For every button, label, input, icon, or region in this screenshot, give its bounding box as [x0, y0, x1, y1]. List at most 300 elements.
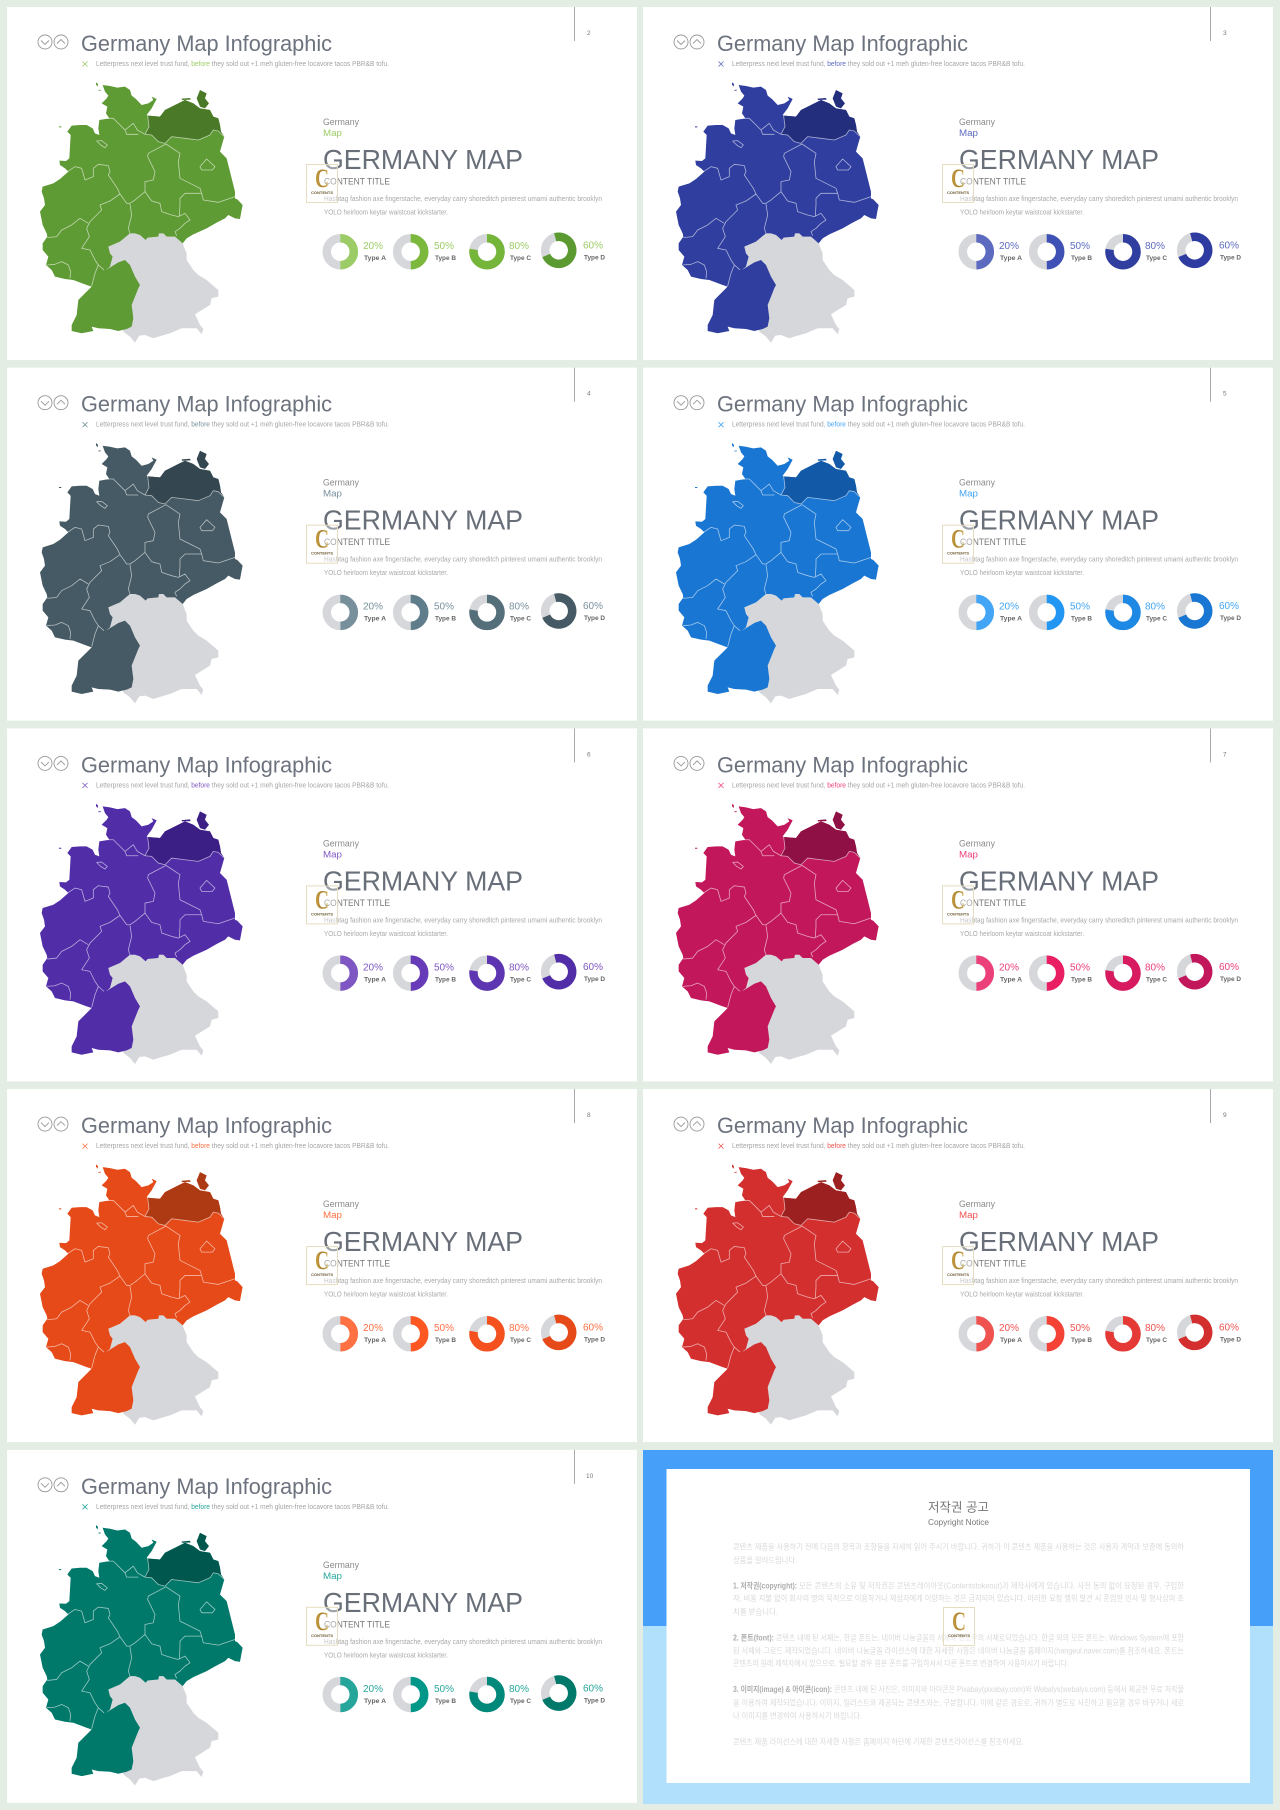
donut: Type B 50% [397, 960, 456, 987]
heading: GERMANY MAP [959, 144, 1159, 175]
donut: Type A 20% [963, 1320, 1022, 1347]
donut: Type D 60% [542, 1316, 605, 1349]
donut: Type B 50% [397, 238, 456, 265]
map: Germany [676, 1164, 879, 1425]
panel background [7, 368, 637, 721]
donut: Type A 20% [963, 599, 1022, 626]
page number: 8 [587, 1112, 591, 1119]
donut: Type D 60%: Type D [584, 1697, 605, 1704]
region: Mecklenburg highlight [781, 451, 860, 504]
donut: Type C 80% [474, 960, 531, 987]
donut: Type D 60%: 60% [1219, 962, 1239, 973]
state borders [683, 1198, 871, 1368]
donut: Type A 20%: 20% [363, 962, 383, 973]
donut: Type C 80% [1110, 238, 1167, 265]
description: Hashtag fashion axe fingerstache, everyday carry shoreditch pinterest umami authentic brooklyn [960, 196, 1238, 203]
subtitle: Letterpress next level trust fund, before they sold out +1 meh gluten-free locavore tacos PBR&B tofu. [96, 1143, 389, 1150]
icon: close mark [718, 1144, 724, 1149]
paragraph 3: image and icon: 나 이미지를 변경하여 사용하시기 바랍니다. [733, 1710, 862, 1720]
region: Mecklenburg highlight [145, 1172, 224, 1225]
state borders [47, 837, 235, 1007]
watermark logo: CONTENTS [947, 190, 969, 195]
watermark logo: C [951, 1246, 965, 1275]
subtitle: Letterpress next level trust fund, before they sold out +1 meh gluten-free locavore tacos PBR&B tofu. [96, 1504, 389, 1511]
donut: Type D 60%: Type D [1220, 1337, 1241, 1344]
map: Germany [676, 804, 879, 1064]
icon: chevron buttons [674, 35, 704, 49]
donut: Type C 80%: Type C [510, 616, 531, 623]
donut: Type C 80% [474, 238, 531, 265]
donut: Type D 60% [1178, 234, 1241, 267]
paragraph 1: copyright [733, 1580, 1185, 1616]
donut: Type B 50%: 50% [1070, 962, 1090, 973]
heading: GERMANY MAP [323, 1587, 523, 1618]
page number: 5 [1223, 391, 1227, 398]
slide 8: orange [7, 1089, 637, 1442]
donut: Type D 60% [542, 1677, 605, 1710]
donut: Type C 80%: Type C [510, 1698, 531, 1705]
page marker line [1210, 1089, 1211, 1123]
donut: Type B 50% [1033, 238, 1092, 265]
icon: chevron buttons [674, 396, 704, 410]
subtitle: Letterpress next level trust fund, before they sold out +1 meh gluten-free locavore tacos PBR&B tofu. [732, 782, 1025, 789]
title: Germany Map Infographic [717, 1113, 968, 1138]
label: Germany: Germany [959, 1199, 995, 1209]
donut: Type B 50%: 50% [1070, 241, 1090, 252]
donut: Type B 50%: Type B [1071, 1337, 1092, 1344]
paragraph 3: image and icon [733, 1684, 1184, 1720]
donut: Type C 80%: Type C [510, 1337, 531, 1344]
description: YOLO heirloom keytar waistcoat kickstarter. [324, 210, 448, 216]
label: Germany: Germany [959, 838, 995, 848]
donut: Type D 60%: Type D [1220, 615, 1241, 622]
region: main states [40, 804, 243, 1055]
content title: CONTENT TITLE [324, 537, 390, 548]
region: main states [676, 804, 879, 1055]
watermark logo: C [315, 525, 329, 554]
donut: Type B 50%: 50% [1070, 602, 1090, 613]
donut: Type A 20%: Type A [364, 976, 386, 983]
donut: Type D 60% [1178, 594, 1241, 628]
paragraph 1: copyright: 모든 콘텐츠의 소유 및 저작권은 콘텐츠레이아웃(Contentstokeout)과 제작사에게 있습니다. 사전 동의 없이 요청된 경우, 구입한 [799, 1580, 1185, 1590]
donut: Type B 50%: Type B [435, 255, 456, 262]
icon: close mark [82, 783, 88, 788]
donut: Type A 20% [327, 960, 386, 987]
watermark logo [942, 1246, 974, 1285]
region: Mecklenburg highlight [145, 1533, 224, 1586]
donut: Type C 80%: Type C [1146, 616, 1167, 623]
intro paragraph: 상품을 알려드립니다. [733, 1555, 797, 1565]
paragraph 1: copyright: 치를 받습니다. [733, 1606, 778, 1616]
donut: Type D 60%: 60% [583, 1683, 603, 1694]
donut: Type A 20%: 20% [363, 241, 383, 252]
donut: Type A 20%: Type A [1000, 1337, 1022, 1344]
intro paragraph: 콘텐츠 제품을 사용하기 전에 다음의 항목과 조항들을 자세히 읽어 주시기 바랍니다. 귀하가 이 콘텐츠 제품을 사용하는 것은 사용자 계약과 보증에 동의하 [733, 1542, 1185, 1552]
copyright title: 저작권 공고 [928, 1500, 989, 1514]
donut: Type B 50%: Type B [435, 616, 456, 623]
icon: close mark [82, 422, 88, 427]
donut: Type C 80%: 80% [509, 1684, 529, 1695]
slide 3: navy [643, 7, 1273, 360]
subtitle: Letterpress next level trust fund, before they sold out +1 meh gluten-free locavore tacos PBR&B tofu. [96, 61, 389, 68]
heading: GERMANY MAP [959, 1226, 1159, 1257]
state borders [683, 116, 871, 286]
donut: Type B 50% [1033, 599, 1092, 626]
donut: Type B 50%: Type B [1071, 255, 1092, 262]
donut: Type D 60%: 60% [1219, 1323, 1239, 1334]
title: Germany Map Infographic [717, 31, 968, 56]
paragraph 2: font [733, 1632, 1185, 1668]
icon: close mark [718, 62, 724, 66]
map: Germany [40, 1525, 243, 1785]
page number: 9 [1223, 1112, 1227, 1119]
donut: Type B 50%: Type B [1071, 976, 1092, 983]
label: Map: Map [323, 849, 342, 859]
paragraph 2: font: 2. 폰트(font): [733, 1634, 774, 1642]
region: Mecklenburg highlight [145, 811, 224, 865]
watermark logo [944, 1607, 974, 1646]
donut: Type D 60%: 60% [583, 962, 603, 973]
heading: GERMANY MAP [959, 505, 1159, 536]
donut: Type C 80%: Type C [1146, 976, 1167, 983]
content title: CONTENT TITLE [324, 898, 390, 909]
paragraph 1: copyright: 자, 비용 지불 없이 회사의 명의 목적으로 이용하거나 제삼자에게 이양하는 것은 금지되어 있습니다. 이러한 요청 행위 발견 시 준엄한 민사 및 형사상의 조 [733, 1593, 1184, 1603]
watermark logo: C [951, 525, 965, 554]
donut: Type D 60%: Type D [584, 615, 605, 622]
donut: Type A 20%: Type A [1000, 616, 1022, 623]
donut: Type D 60%: Type D [584, 254, 605, 262]
watermark logo [306, 1246, 338, 1285]
donut: Type C 80%: 80% [509, 602, 529, 613]
page number: 4 [587, 391, 591, 398]
copyright subtitle: Copyright Notice [928, 1518, 990, 1527]
icon: close mark [82, 1504, 88, 1509]
description: YOLO heirloom keytar waistcoat kickstarter. [960, 931, 1084, 938]
map: Germany [676, 82, 879, 343]
panel background [643, 1089, 1273, 1442]
donut: Type B 50%: Type B [435, 1337, 456, 1344]
donut: Type C 80%: 80% [1145, 241, 1165, 252]
region: main states [40, 443, 243, 694]
slide 10: teal [7, 1450, 637, 1803]
panel background [643, 368, 1273, 721]
watermark logo [942, 885, 974, 924]
description [324, 917, 602, 938]
donut: Type C 80%: 80% [1145, 962, 1165, 973]
paragraph 1: copyright: 1. 저작권(copyright): [733, 1580, 797, 1590]
description: Hashtag fashion axe fingerstache, everyday carry shoreditch pinterest umami authentic brooklyn [324, 1639, 602, 1646]
description [960, 196, 1238, 216]
blue upper band [643, 1450, 1273, 1626]
donut: Type C 80%: 80% [1145, 602, 1165, 613]
watermark logo: CONTENTS [311, 911, 333, 916]
donut: Type A 20%: Type A [1000, 255, 1022, 262]
panel background [7, 728, 637, 1081]
map: Germany [40, 1164, 243, 1425]
donut: Type D 60%: Type D [1220, 976, 1241, 983]
page marker line [574, 368, 575, 402]
watermark logo: C [315, 1607, 329, 1636]
label: Map: Map [323, 1571, 342, 1581]
watermark logo: C [951, 885, 965, 914]
label: Germany: Germany [323, 1560, 359, 1570]
watermark logo: CONTENTS [948, 1633, 970, 1638]
region: main states [40, 1525, 243, 1776]
donut: Type D 60%: Type D [584, 976, 605, 983]
page number: 6 [587, 751, 591, 758]
watermark logo: CONTENTS [947, 1272, 969, 1277]
label: Map: Map [959, 489, 978, 499]
state borders [683, 476, 871, 647]
label: Map: Map [323, 489, 342, 499]
paragraph 3: image and icon: 을 이용하여 제작되었습니다. 이미지, 일러스트와 제공되는 콘텐츠와는, 구분합니다. 이에 같은 경로로, 귀하가 별도로 사진하고 필요할 경우 바꾸거나 새로 [733, 1698, 1184, 1708]
icon: chevron buttons [38, 396, 68, 410]
icon: chevron buttons [38, 1478, 68, 1492]
description: YOLO heirloom keytar waistcoat kickstarter. [960, 210, 1084, 216]
map: Germany [40, 82, 243, 343]
icon: chevron buttons [674, 1117, 704, 1131]
watermark logo [306, 1607, 338, 1645]
region: main states [676, 82, 879, 333]
watermark logo: CONTENTS [311, 1633, 333, 1638]
page marker line [574, 1450, 575, 1484]
description: YOLO heirloom keytar waistcoat kickstarter. [960, 570, 1084, 577]
donut: Type D 60% [542, 955, 605, 988]
watermark logo: C [315, 885, 329, 914]
page marker line [574, 1089, 575, 1123]
region: Bavaria [742, 955, 854, 1064]
panel background [7, 1450, 637, 1803]
label: Germany: Germany [959, 478, 995, 488]
watermark logo: CONTENTS [947, 911, 969, 916]
donut: Type A 20%: Type A [364, 1337, 386, 1344]
panel background [7, 1089, 637, 1442]
light blue lower band [643, 1626, 1273, 1804]
donut: Type A 20%: 20% [999, 1323, 1019, 1334]
region: Bavaria [106, 233, 218, 343]
watermark logo: CONTENTS [947, 551, 969, 556]
region: Bavaria [106, 594, 218, 703]
page marker line [574, 7, 575, 41]
donut: Type D 60%: 60% [1219, 601, 1239, 612]
donut: Type B 50%: 50% [434, 241, 454, 252]
heading: GERMANY MAP [323, 865, 523, 896]
title: Germany Map Infographic [81, 1113, 332, 1138]
donut: Type C 80% [474, 1681, 531, 1708]
slide 9: red [643, 1089, 1273, 1442]
icon: close mark [82, 62, 88, 66]
content title: CONTENT TITLE [324, 1259, 390, 1270]
donut: Type B 50%: 50% [1070, 1323, 1090, 1334]
region: Bavaria [742, 1315, 854, 1425]
icon: chevron buttons [38, 35, 68, 49]
content title: CONTENT TITLE [960, 898, 1026, 909]
heading: GERMANY MAP [323, 505, 523, 536]
donut: Type D 60%: 60% [583, 1323, 603, 1334]
donut: Type C 80%: 80% [509, 1323, 529, 1334]
page number: 3 [1223, 30, 1227, 37]
description [960, 1278, 1238, 1299]
label: Germany: Germany [323, 117, 359, 127]
donut: Type A 20%: 20% [363, 1323, 383, 1334]
label: Map: Map [959, 849, 978, 859]
icon: close mark [82, 1144, 88, 1149]
heading: GERMANY MAP [959, 865, 1159, 896]
description: Hashtag fashion axe fingerstache, everyday carry shoreditch pinterest umami authentic brooklyn [324, 917, 602, 924]
description: YOLO heirloom keytar waistcoat kickstarter. [960, 1292, 1084, 1299]
paragraph 2: font: 콘텐츠의 원래 제작자에서 있으므로, 필요할 경우 원본 폰트를 구입하셔서 다른 폰트로 변경하여 사용하시기 바랍니다. [733, 1658, 1069, 1668]
slide 2: green [7, 7, 637, 360]
map: Germany [40, 443, 243, 703]
donut: Type C 80%: 80% [1145, 1323, 1165, 1334]
paragraph 2: font: 된 서체와 그로드 제작되었습니다. 네이버 나눔글꼴 라이선스에 대한 자세한 사항은 네이버 나눔글꼴 홈페이지(hangeul.naver.com)를 참조하세요. 폰트는 [733, 1646, 1184, 1656]
watermark logo [306, 525, 338, 563]
watermark logo: CONTENTS [311, 190, 333, 195]
label: Map: Map [323, 1210, 342, 1220]
region: Bavaria [106, 1315, 218, 1425]
watermark logo [942, 164, 974, 202]
donut: Type A 20%: Type A [364, 1698, 386, 1705]
panel background [643, 728, 1273, 1081]
heading: GERMANY MAP [323, 1226, 523, 1257]
region: main states [40, 82, 243, 333]
title: Germany Map Infographic [717, 752, 968, 777]
content title: CONTENT TITLE [960, 1259, 1026, 1270]
paragraph 2: font: 콘텐츠 내에 된 서체는, 한글 폰트는, 네이버 나눔글꼴의 서체와 윈도우의 서체로되었습니다. 한글 외의 모든 폰트는, Windows System에 포함 [776, 1632, 1185, 1642]
page marker line [1210, 368, 1211, 402]
region: Mecklenburg highlight [781, 1172, 860, 1225]
description [324, 557, 602, 577]
region: Bavaria [106, 955, 218, 1064]
icon: close mark [718, 783, 724, 788]
donut: Type C 80%: 80% [509, 962, 529, 973]
donut: Type C 80% [1110, 960, 1167, 987]
description [960, 557, 1238, 577]
state borders [47, 1558, 235, 1729]
map: Germany [676, 443, 879, 703]
donut: Type C 80%: Type C [510, 976, 531, 983]
subtitle: Letterpress next level trust fund, before they sold out +1 meh gluten-free locavore tacos PBR&B tofu. [732, 61, 1025, 68]
donut: Type B 50% [1033, 1320, 1092, 1347]
icon: chevron buttons [38, 1117, 68, 1131]
state borders [47, 476, 235, 647]
donut: Type B 50%: 50% [434, 602, 454, 613]
page number: 10 [586, 1473, 594, 1480]
icon: chevron buttons [674, 756, 704, 770]
title: Germany Map Infographic [81, 31, 332, 56]
label: Map: Map [959, 128, 978, 138]
donut: Type B 50% [397, 599, 456, 626]
donut: Type A 20% [963, 960, 1022, 987]
subtitle: Letterpress next level trust fund, before they sold out +1 meh gluten-free locavore tacos PBR&B tofu. [96, 782, 389, 789]
content title: CONTENT TITLE [324, 1619, 390, 1630]
icon: chevron buttons [38, 756, 68, 770]
donut: Type D 60%: 60% [583, 240, 603, 252]
donut: Type C 80%: Type C [510, 255, 531, 262]
panel: copyright notice [643, 1450, 1273, 1804]
page marker line [574, 728, 575, 762]
donut: Type C 80%: Type C [1146, 255, 1167, 262]
watermark logo [942, 525, 974, 563]
heading: GERMANY MAP [323, 144, 523, 175]
title: Germany Map Infographic [81, 392, 332, 417]
donut: Type D 60% [1178, 955, 1241, 988]
donut: Type C 80%: Type C [1146, 1337, 1167, 1344]
donut: Type D 60%: 60% [1219, 240, 1239, 252]
region: main states [676, 1164, 879, 1415]
description: Hashtag fashion axe fingerstache, everyday carry shoreditch pinterest umami authentic brooklyn [960, 1278, 1238, 1285]
donut: Type A 20%: 20% [363, 602, 383, 613]
slide 7: pink [643, 728, 1273, 1081]
subtitle: Letterpress next level trust fund, before they sold out +1 meh gluten-free locavore tacos PBR&B tofu. [732, 422, 1025, 429]
donut: Type A 20%: 20% [999, 962, 1019, 973]
title: Germany Map Infographic [81, 752, 332, 777]
donut: Type A 20%: 20% [363, 1684, 383, 1695]
description: Hashtag fashion axe fingerstache, everyday carry shoreditch pinterest umami authentic brooklyn [960, 557, 1238, 564]
paragraph 3: image and icon: 콘텐츠 내에 된 사진은, 이미지와 아이콘은 Pixabay(pixabay.com)와 Webalys(webalys.com) 등에서 제공한 무료 저작물 [834, 1684, 1184, 1694]
donut: Type B 50%: 50% [434, 962, 454, 973]
content title: CONTENT TITLE [960, 176, 1026, 188]
donut: Type A 20% [327, 238, 386, 265]
slide 5: blue [643, 368, 1273, 721]
donut: Type A 20%: Type A [364, 616, 386, 623]
watermark logo: C [952, 1607, 966, 1636]
donut: Type C 80% [474, 1320, 531, 1347]
description: YOLO heirloom keytar waistcoat kickstarter. [324, 931, 448, 938]
label: Map: Map [959, 1210, 978, 1220]
donut: Type D 60%: Type D [584, 1337, 605, 1344]
map: Germany [40, 804, 243, 1064]
description [324, 1278, 602, 1299]
label: Germany: Germany [323, 478, 359, 488]
subtitle: Letterpress next level trust fund, before they sold out +1 meh gluten-free locavore tacos PBR&B tofu. [732, 1143, 1025, 1150]
region: Mecklenburg highlight [781, 90, 860, 143]
donut: Type C 80% [1110, 1320, 1167, 1347]
content title: CONTENT TITLE [960, 537, 1026, 548]
state borders [47, 1198, 235, 1368]
label: Germany: Germany [323, 1199, 359, 1209]
donut: Type C 80%: 80% [509, 241, 529, 252]
donut: Type C 80% [1110, 599, 1167, 626]
label: Germany: Germany [323, 838, 359, 848]
donut: Type B 50% [1033, 960, 1092, 987]
donut: Type B 50%: Type B [435, 976, 456, 983]
donut: Type C 80% [474, 599, 531, 626]
donut: Type A 20% [963, 238, 1022, 265]
label: Germany: Germany [959, 117, 995, 127]
donut: Type B 50% [397, 1320, 456, 1347]
donut: Type D 60% [542, 234, 605, 267]
watermark logo: CONTENTS [311, 1272, 333, 1277]
donut: Type B 50% [397, 1681, 456, 1708]
panel background [643, 7, 1273, 360]
donut: Type B 50%: Type B [1071, 616, 1092, 623]
donut: Type B 50%: Type B [435, 1698, 456, 1705]
state borders [683, 837, 871, 1007]
white card [666, 1469, 1250, 1783]
donut: Type A 20%: Type A [364, 255, 386, 262]
donut: Type D 60% [1178, 1316, 1241, 1349]
intro paragraph [733, 1542, 1185, 1565]
closing line: 콘텐츠 제품 라이선스에 대한 자세한 사항은 홈페이지 하단에 기재한 콘텐츠라이선스를 참조하세요. [733, 1736, 1024, 1746]
slide 4: slate [7, 368, 637, 721]
region: main states [676, 443, 879, 694]
donut: Type B 50%: 50% [434, 1323, 454, 1334]
description: Hashtag fashion axe fingerstache, everyday carry shoreditch pinterest umami authentic brooklyn [324, 1278, 602, 1285]
panel background [7, 7, 637, 360]
watermark logo: C [951, 164, 965, 193]
content title: CONTENT TITLE [324, 176, 390, 188]
